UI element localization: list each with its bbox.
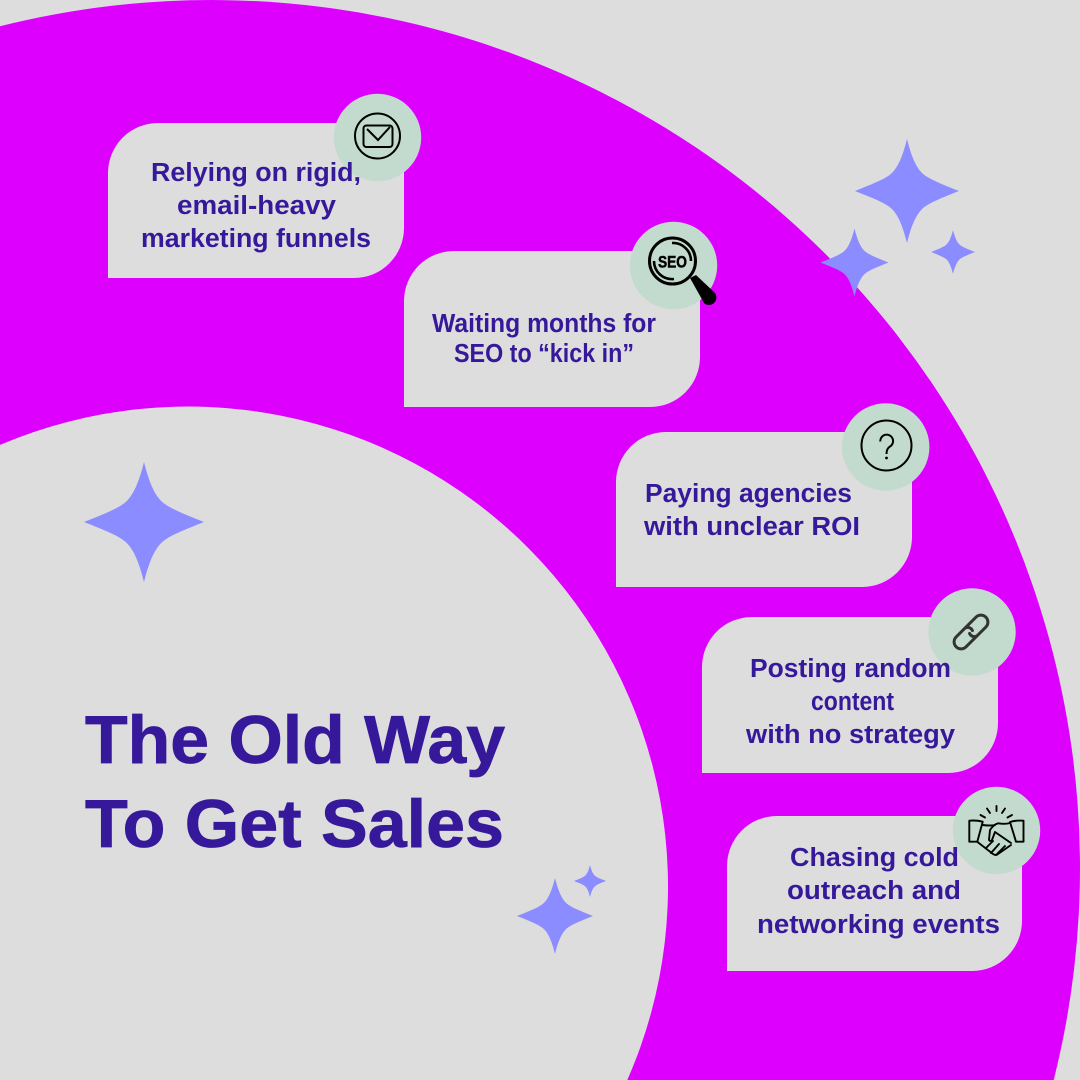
title: The Old Way bbox=[85, 702, 505, 778]
card: email funnels: marketing funnels bbox=[141, 225, 371, 253]
sparkle: left large bbox=[84, 462, 204, 582]
card: email funnels: email-heavy bbox=[177, 192, 337, 220]
card: content: Posting random bbox=[750, 655, 951, 683]
sparkle: bottom small bbox=[574, 865, 606, 897]
card: SEO bbox=[404, 222, 717, 407]
sparkle: bottom medium bbox=[517, 878, 593, 954]
icon: SEO magnifier bbox=[630, 222, 717, 309]
card: agencies: with unclear ROI bbox=[643, 513, 860, 541]
sparkle: top left small bbox=[820, 228, 888, 296]
card: content: with no strategy bbox=[745, 721, 956, 749]
card: agencies bbox=[616, 403, 929, 587]
card: content: content bbox=[811, 688, 894, 716]
card: content bbox=[702, 588, 1016, 773]
sparkle: top large bbox=[855, 139, 959, 243]
card: SEO: Waiting months for bbox=[432, 310, 656, 338]
icon: handshake bbox=[953, 787, 1040, 874]
icon: envelope bbox=[334, 94, 421, 181]
icon: question mark bbox=[842, 403, 929, 491]
icon: chain link bbox=[928, 588, 1016, 676]
card: outreach: Chasing cold bbox=[790, 844, 959, 872]
sparkle: top right small bbox=[931, 230, 975, 274]
card: outreach bbox=[727, 787, 1040, 971]
title bbox=[85, 702, 505, 862]
title: To Get Sales bbox=[85, 786, 504, 862]
card: SEO: SEO to “kick in” bbox=[454, 340, 634, 368]
card: email funnels: Relying on rigid, bbox=[151, 159, 361, 187]
card: email funnels bbox=[108, 94, 421, 278]
card: outreach: networking events bbox=[757, 911, 1000, 939]
card: outreach: outreach and bbox=[787, 877, 961, 905]
icon: SEO magnifier: SEO bbox=[658, 254, 687, 272]
card: agencies: Paying agencies bbox=[645, 480, 852, 508]
inner grey circle bbox=[0, 407, 668, 1080]
